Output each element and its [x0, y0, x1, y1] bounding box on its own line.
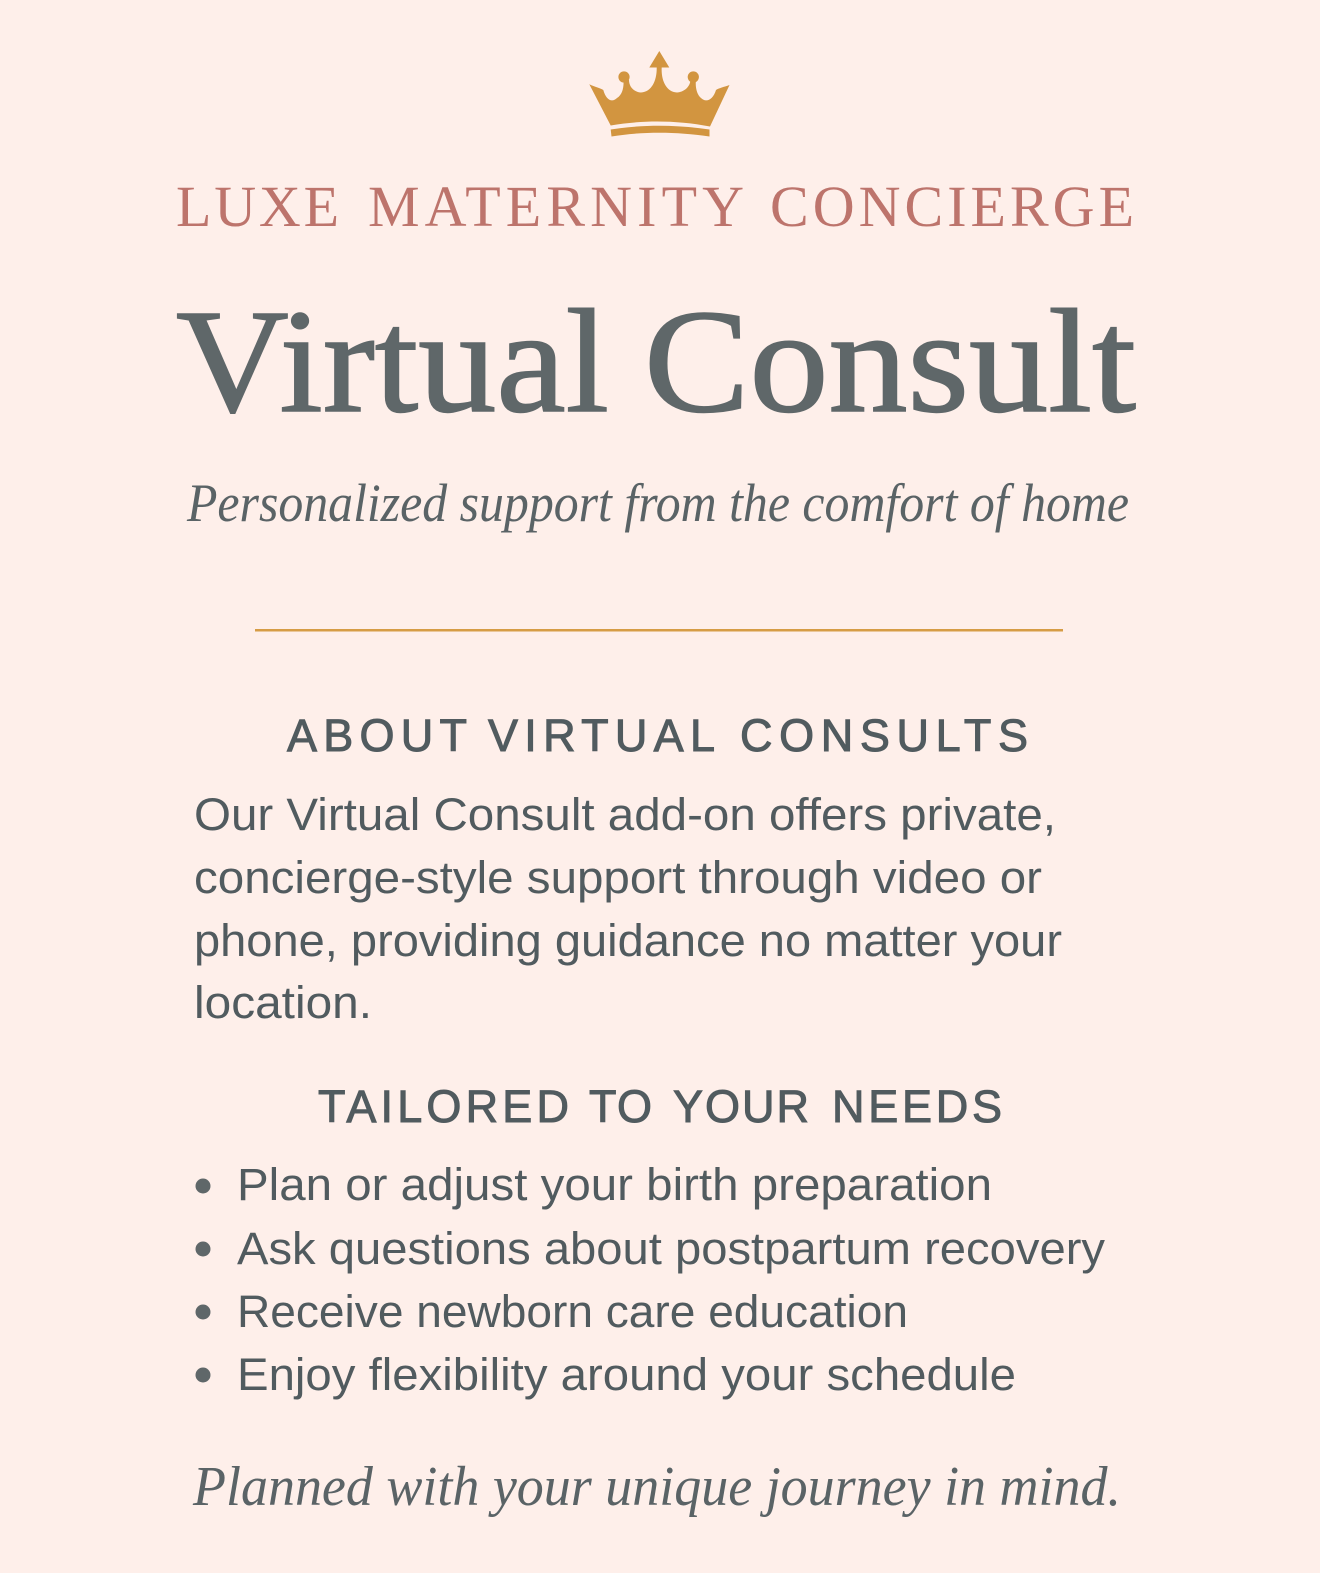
closing tagline: Planned with your unique journey in mind.: [192, 1456, 1121, 1518]
heading: about virtual consults: [287, 710, 1028, 761]
subtitle: Personalized support from the comfort of home: [186, 473, 1129, 533]
heading: tailored to your needs: YOUR: [673, 1081, 809, 1132]
eyebrow heading: LUXE: [176, 174, 339, 239]
heading: tailored to your needs: [318, 1081, 1002, 1132]
body paragraph: phone, providing guidance no matter your: [194, 915, 1062, 966]
title: [176, 280, 1136, 444]
eyebrow heading: MATERNITY: [368, 174, 744, 239]
bullet list: Ask questions about postpartum recovery: [237, 1223, 1106, 1274]
section: about virtual consults: [194, 710, 1062, 1028]
bullet list: [196, 1159, 1106, 1400]
eyebrow heading: [176, 174, 1134, 239]
bullet list: Plan or adjust your birth preparation: [237, 1159, 992, 1210]
body paragraph: [194, 789, 1062, 1028]
body paragraph: location.: [194, 977, 372, 1028]
section: tailored to your needs: [196, 1081, 1106, 1400]
icon: crown: [589, 51, 730, 136]
heading: about virtual consults: ABOUT: [287, 710, 467, 761]
divider: [255, 629, 1063, 632]
heading: tailored to your needs: NEEDS: [832, 1081, 1002, 1132]
heading: tailored to your needs: TAILORED: [318, 1081, 569, 1132]
bullet list: Receive newborn care education: [237, 1286, 908, 1337]
heading: tailored to your needs: TO: [589, 1081, 652, 1132]
bullet list: Enjoy flexibility around your schedule: [237, 1349, 1016, 1400]
title: Virtual: [176, 280, 609, 444]
heading: about virtual consults: CONSULTS: [740, 710, 1028, 761]
body paragraph: Our Virtual Consult add-on offers private,: [194, 789, 1056, 840]
title: Consult: [644, 280, 1136, 444]
eyebrow heading: CONCIERGE: [770, 174, 1134, 239]
heading: about virtual consults: VIRTUAL: [488, 710, 715, 761]
body paragraph: concierge-style support through video or: [194, 852, 1042, 903]
